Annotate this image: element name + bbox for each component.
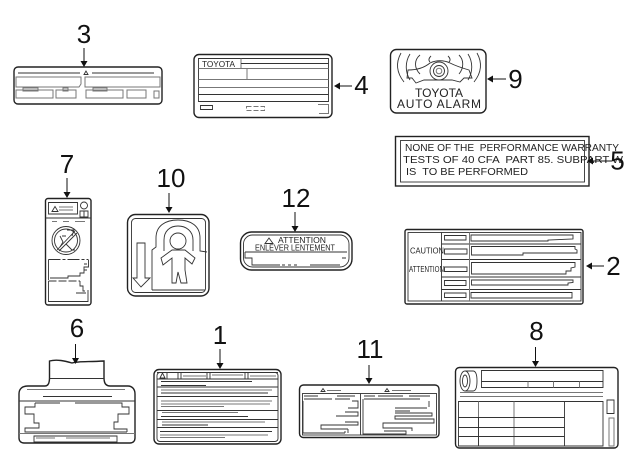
label 12: ATTENTION — [278, 235, 326, 245]
label 9: AUTO ALARM — [397, 97, 481, 111]
callout number 5 — [587, 146, 625, 176]
label 12 — [240, 232, 352, 270]
label 5: NONE OF THE PERFORMANCE WARRANTY — [405, 142, 619, 154]
label 4 — [194, 54, 332, 118]
callout number 2 — [586, 251, 621, 281]
callout number 1 — [213, 320, 227, 369]
callout number 11: 11 — [356, 334, 384, 364]
label 1 — [154, 370, 281, 444]
callout number 12 — [282, 183, 310, 232]
callout number 11 — [356, 334, 384, 384]
callout number 9: 9 — [508, 64, 523, 94]
label 2 — [405, 230, 583, 304]
label 9: TOYOTA — [415, 86, 463, 100]
label 10 — [128, 214, 209, 296]
icon: down arrow — [133, 243, 150, 287]
label 5: IS TO BE PERFORMED — [406, 166, 528, 178]
icon: child in seat — [152, 220, 207, 290]
callout number 6: 6 — [70, 313, 84, 343]
label 8 — [456, 368, 618, 448]
callout number 8: 8 — [529, 316, 544, 346]
callout number 4: 4 — [354, 70, 369, 100]
label 2: ATTENTION — [409, 265, 444, 274]
icon: manual roll — [460, 371, 477, 391]
icon: no child seat — [52, 226, 80, 254]
callout number 5: 5 — [610, 146, 625, 176]
callout number 6 — [70, 313, 84, 364]
brand name: TOYOTA — [202, 60, 236, 69]
callout number 3: 3 — [77, 19, 91, 49]
callout number 10: 10 — [157, 163, 185, 193]
callout number 10 — [157, 163, 185, 213]
label 11 — [300, 385, 439, 438]
callout number 12: 12 — [282, 183, 310, 213]
callout number 3 — [77, 19, 91, 67]
callout number 7: 7 — [60, 149, 74, 179]
callout number 7 — [60, 149, 74, 198]
label 12: ENLEVER LENTEMENT — [255, 242, 335, 252]
label 9 — [390, 50, 486, 113]
label 5: TESTS OF 40 CFA PART 85. SUBPART W — [403, 154, 623, 166]
label 2: CAUTION — [410, 246, 444, 256]
label 3 — [14, 67, 162, 104]
callout number 4 — [334, 70, 369, 100]
callout number 1: 1 — [213, 320, 227, 350]
label 6 — [19, 360, 135, 443]
callout number 9 — [487, 64, 523, 94]
callout number 8 — [529, 316, 544, 367]
label 7 — [46, 198, 91, 305]
label 5 — [396, 136, 623, 186]
callout number 2: 2 — [606, 251, 621, 281]
icon: car with alarm waves — [398, 53, 480, 83]
